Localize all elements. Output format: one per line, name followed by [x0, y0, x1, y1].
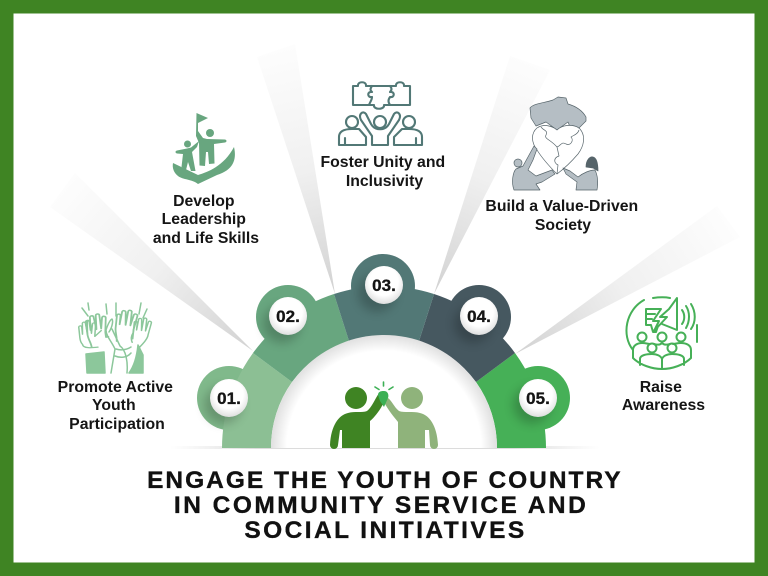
- number badge 05: 05.: [526, 389, 550, 408]
- icon: raised hands: [78, 303, 152, 373]
- top figure: [530, 97, 586, 130]
- label: Foster Unity and Inclusivity: Foster Unity and: [320, 154, 445, 171]
- label: Raise Awareness: Raise: [640, 379, 682, 396]
- label: Develop Leadership and Life Skills: and Life Skills: [153, 230, 259, 247]
- icon: people holding a puzzle heart: [513, 97, 598, 190]
- number badge 05: [519, 379, 557, 417]
- label: Foster Unity and Inclusivity: Inclusivity: [346, 173, 423, 190]
- title: SOCIAL INITIATIVES: [244, 517, 527, 544]
- title: ENGAGE THE YOUTH OF COUNTRY: [147, 467, 622, 494]
- baseline shadow: [170, 446, 600, 449]
- number badge 02: 02.: [276, 307, 300, 326]
- inner white semicircle: [271, 335, 497, 448]
- segment 03 with knob: [334, 254, 434, 341]
- number badge 01: [210, 379, 248, 417]
- number badge 02: [269, 297, 307, 335]
- label: Build a Value-Driven Society: Build a Value-Driven: [485, 198, 638, 215]
- title: IN COMMUNITY SERVICE AND: [174, 492, 588, 519]
- label: Promote Active Youth Participation: Participation: [69, 416, 165, 433]
- semicircular five-step arch: [197, 254, 570, 448]
- puzzle heart: [532, 125, 584, 174]
- icon: two people high five: [330, 382, 438, 449]
- lower left figure: [513, 146, 555, 190]
- label: Develop Leadership and Life Skills: Develop: [173, 193, 235, 210]
- label: Raise Awareness: Awareness: [622, 397, 705, 414]
- number badge 03: [365, 266, 403, 304]
- knob shadows: [204, 274, 551, 424]
- icon: megaphone and crowd: [626, 297, 697, 369]
- label: Promote Active Youth Participation: Promote Active: [58, 379, 173, 396]
- lower right figure: [563, 168, 598, 190]
- label: Build a Value-Driven Society: Society: [535, 217, 591, 234]
- icon: leaders with flag on leaves: [173, 113, 235, 184]
- radiating light rays: [50, 44, 740, 354]
- label: Promote Active Youth Participation: Youth: [92, 397, 136, 414]
- number badge 04: [460, 297, 498, 335]
- segment 04 with knob: [419, 285, 515, 382]
- number badge 04: 04.: [467, 307, 491, 326]
- number badge 01: 01.: [217, 389, 241, 408]
- segment 01 with knob: [197, 353, 292, 448]
- segment 02 with knob: [253, 285, 349, 382]
- label: Develop Leadership and Life Skills: Leadership: [162, 211, 246, 228]
- icon: puzzle and three people: [339, 82, 422, 145]
- number badge 03: 03.: [372, 276, 396, 295]
- segment 05 with knob: [476, 353, 570, 448]
